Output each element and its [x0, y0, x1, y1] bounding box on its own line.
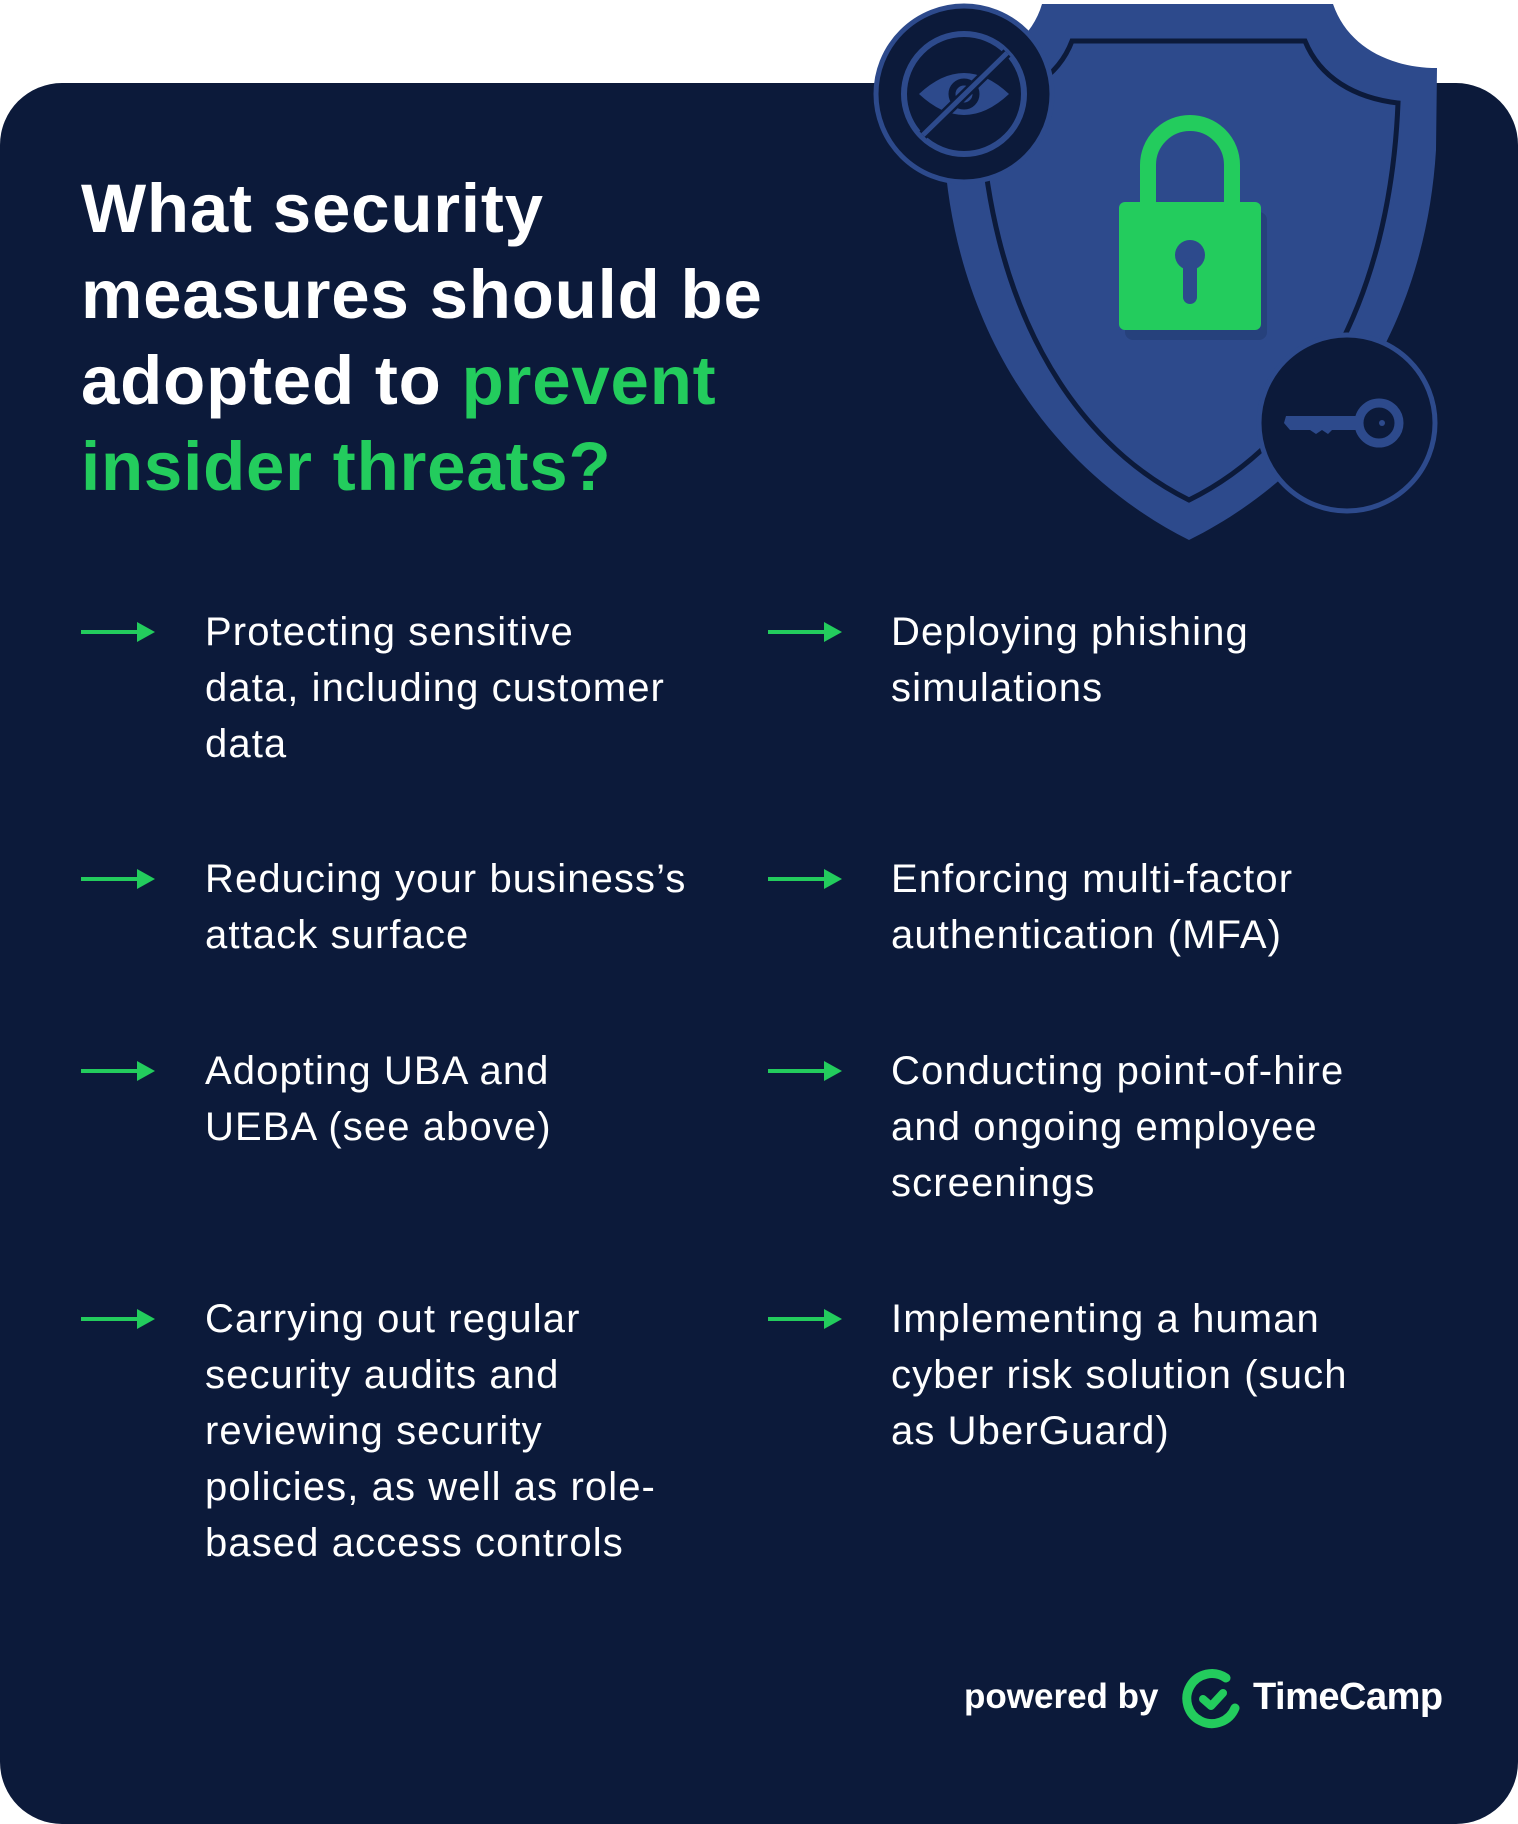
- item: protecting sensitive data: data, including customer: [205, 666, 665, 710]
- item: screenings: and ongoing employee: [891, 1105, 1318, 1149]
- item: security audits: Carrying out regular: [205, 1297, 580, 1341]
- text: powered by: powered by: [964, 1677, 1158, 1716]
- illustration: shield with lock: [874, 4, 1438, 540]
- item: MFA: Enforcing multi-factor: [891, 857, 1293, 901]
- footer: powered by TimeCamp: [964, 1669, 1443, 1728]
- text: TimeCamp: TimeCamp: [1253, 1676, 1443, 1718]
- shield: [944, 4, 1437, 540]
- item: protecting sensitive data: data: [205, 722, 287, 766]
- arrow: row 4 right: [768, 1309, 842, 1329]
- item: security audits: policies, as well as role-: [205, 1465, 656, 1509]
- arrow: row 2 right: [768, 869, 842, 889]
- item: security audits: based access controls: [205, 1521, 624, 1565]
- item: attack surface: [205, 857, 686, 957]
- item: protecting sensitive data: [205, 610, 665, 766]
- title: insider threats?: [81, 428, 611, 505]
- arrow: row 3 left: [81, 1061, 155, 1081]
- icon: crossed eye circle: [876, 6, 1052, 182]
- item: phishing simulations: [891, 610, 1249, 710]
- item: security audits: security audits and: [205, 1353, 559, 1397]
- item: MFA: authentication (MFA): [891, 913, 1282, 957]
- item: UBA UEBA: Adopting UBA and: [205, 1049, 550, 1093]
- item: attack surface: attack surface: [205, 913, 469, 957]
- item: human cyber risk: as UberGuard): [891, 1409, 1170, 1453]
- item: human cyber risk: [891, 1297, 1348, 1453]
- arrow: row 1 left: [81, 622, 155, 642]
- item: security audits: reviewing security: [205, 1409, 543, 1453]
- icon: padlock: [1119, 123, 1267, 340]
- item: attack surface: Reducing your business’s: [205, 857, 686, 901]
- item: human cyber risk: Implementing a human: [891, 1297, 1320, 1341]
- title: adopted to prevent: [81, 342, 716, 419]
- item: screenings: screenings: [891, 1161, 1095, 1205]
- item: phishing simulations: simulations: [891, 666, 1103, 710]
- arrow: row 3 right: [768, 1061, 842, 1081]
- arrow: row 1 right: [768, 622, 842, 642]
- item: screenings: [891, 1049, 1344, 1205]
- item: screenings: Conducting point-of-hire: [891, 1049, 1344, 1093]
- title: [81, 170, 763, 505]
- item: UBA UEBA: UEBA (see above): [205, 1105, 552, 1149]
- icon: TimeCamp logo: [1182, 1669, 1240, 1728]
- item: phishing simulations: Deploying phishing: [891, 610, 1249, 654]
- arrow: row 4 left: [81, 1309, 155, 1329]
- item: UBA UEBA: [205, 1049, 552, 1149]
- title: What security: [81, 170, 544, 247]
- arrow: row 2 left: [81, 869, 155, 889]
- item: protecting sensitive data: Protecting sensitive: [205, 610, 574, 654]
- title: measures should be: [81, 256, 763, 333]
- item: human cyber risk: cyber risk solution (such: [891, 1353, 1348, 1397]
- icon: key circle: [1259, 335, 1435, 511]
- item: security audits: [205, 1297, 656, 1565]
- item: MFA: [891, 857, 1293, 957]
